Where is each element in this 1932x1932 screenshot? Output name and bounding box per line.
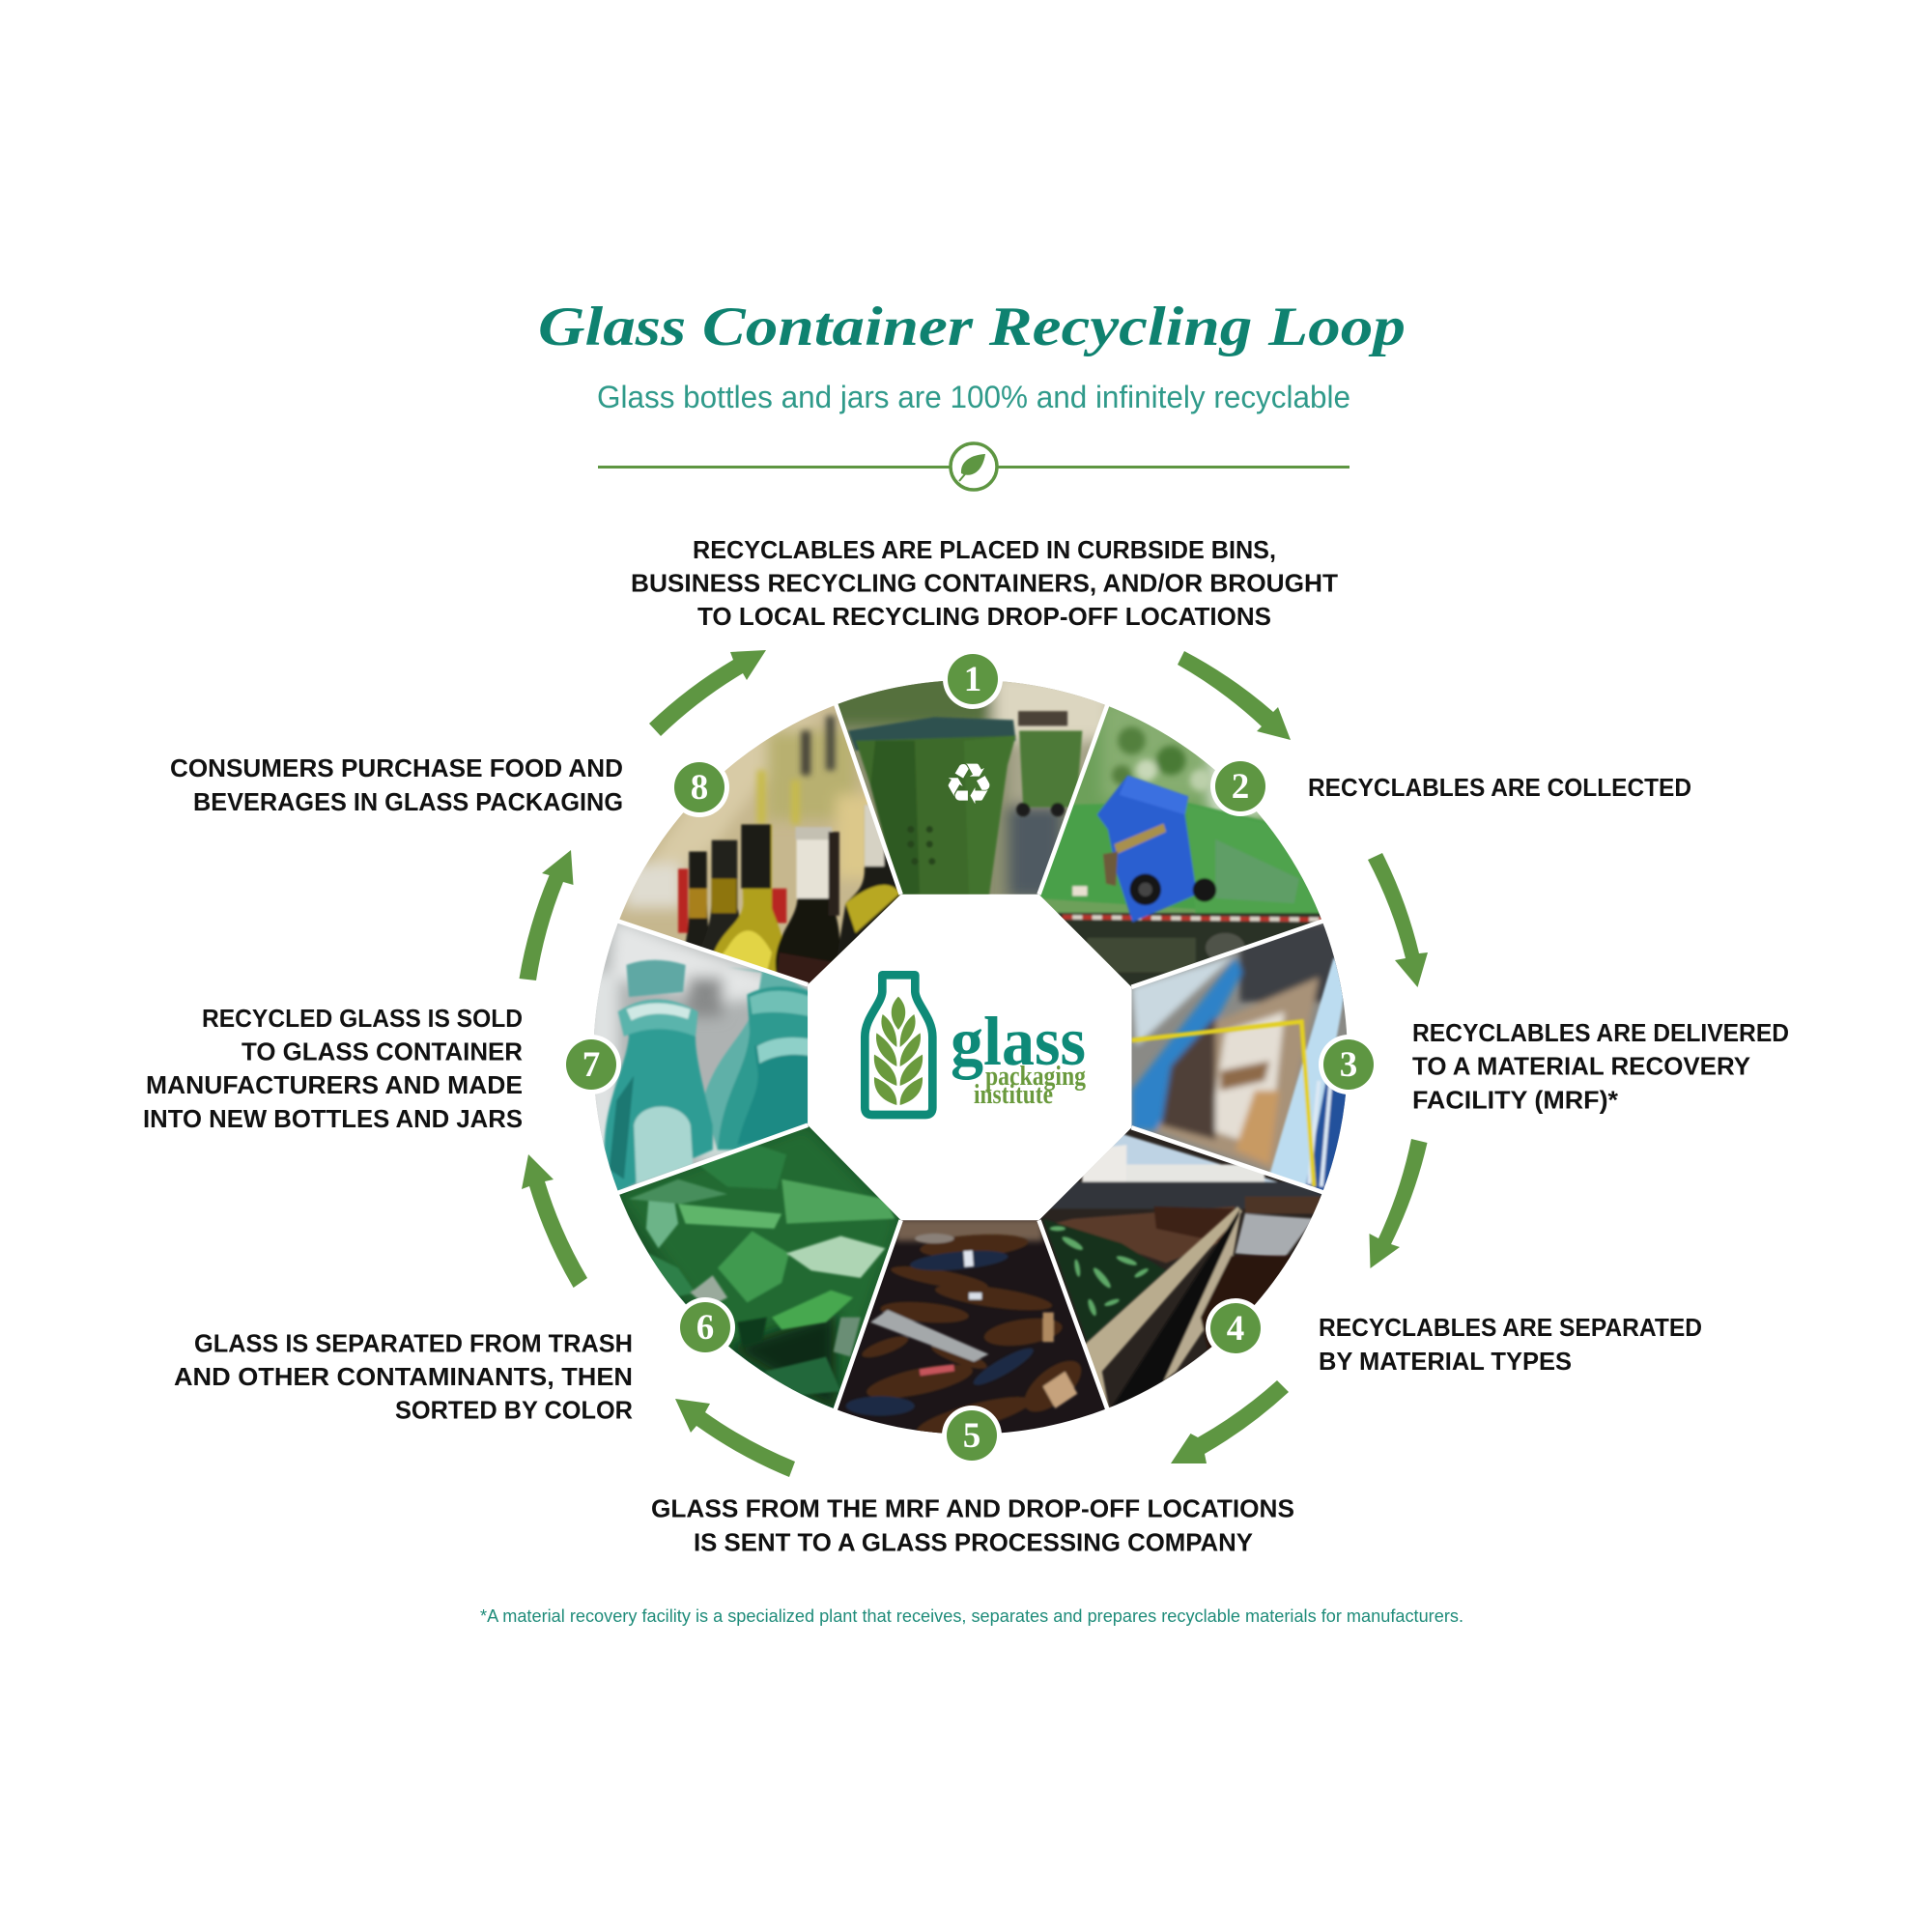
arrow: step 6 to 7: [522, 1154, 587, 1288]
number badge 5: [942, 1406, 1002, 1465]
number badge 7: [561, 1035, 621, 1094]
icon: recycling symbol: ♻: [944, 752, 994, 817]
step 6 text: GLASS IS SEPARATED FROM TRASH: [194, 1329, 633, 1358]
arrow: step 4 to 5: [1171, 1380, 1289, 1463]
photo: material recovery facility conveyor: [1132, 923, 1347, 1190]
step 2 text: RECYCLABLES ARE COLLECTED: [1308, 773, 1691, 802]
number badge 2: 2: [1232, 767, 1249, 807]
step 1 text: TO LOCAL RECYCLING DROP-OFF LOCATIONS: [697, 602, 1271, 631]
step 7 text: TO GLASS CONTAINER: [242, 1037, 523, 1066]
number badge 3: 3: [1340, 1045, 1357, 1085]
step 3 text: RECYCLABLES ARE DELIVERED: [1412, 1018, 1789, 1047]
step 1 text: BUSINESS RECYCLING CONTAINERS, AND/OR BROUGHT: [631, 568, 1338, 597]
step 7 text: INTO NEW BOTTLES AND JARS: [143, 1104, 523, 1133]
step 7 text: [143, 1004, 523, 1133]
photo: sorting bins: [1039, 1128, 1321, 1408]
footnote: *A material recovery facility is a specialized plant that receives, separates and prepares recyclable materials for manufacturers.: [480, 1606, 1463, 1626]
step 6 text: SORTED BY COLOR: [395, 1395, 633, 1424]
number badge 4: 4: [1227, 1309, 1244, 1349]
number badge 8: [669, 757, 729, 817]
number badge 7: 7: [582, 1045, 600, 1085]
step 1 text: [631, 535, 1338, 631]
step 4 text: BY MATERIAL TYPES: [1319, 1347, 1572, 1376]
step 8 text: CONSUMERS PURCHASE FOOD AND: [170, 753, 623, 782]
sector divider lines: [610, 697, 1331, 1415]
step 5 text: IS SENT TO A GLASS PROCESSING COMPANY: [694, 1528, 1253, 1557]
number badge 2: [1210, 756, 1270, 816]
divider with leaf icon: [598, 443, 1350, 490]
number badge 4: [1206, 1298, 1265, 1358]
step 4 text: [1319, 1313, 1702, 1376]
step 8 text: [170, 753, 623, 816]
arrow: step 3 to 4: [1370, 1139, 1428, 1268]
center octagon: [808, 895, 1131, 1220]
logo wordmark: institute: [974, 1080, 1053, 1110]
number badge 5: 5: [963, 1416, 980, 1456]
step 7 text: RECYCLED GLASS IS SOLD: [202, 1004, 523, 1033]
number badge 6: 6: [696, 1308, 714, 1348]
photo: teal glass bottles: [594, 923, 808, 1190]
logo wordmark: [951, 1003, 1086, 1110]
icon: bottle with leaf: [865, 975, 932, 1115]
photo: collection truck with blue bin: [1039, 706, 1321, 987]
step 1 text: RECYCLABLES ARE PLACED IN CURBSIDE BINS,: [693, 535, 1276, 564]
step 3 text: FACILITY (MRF)*: [1412, 1086, 1619, 1115]
subtitle: Glass bottles and jars are 100% and infinitely recyclable: [597, 380, 1350, 414]
step 5 text: GLASS FROM THE MRF AND DROP-OFF LOCATIONS: [651, 1493, 1294, 1522]
center logo: [865, 975, 1086, 1115]
step 7 text: MANUFACTURERS AND MADE: [146, 1070, 523, 1099]
number badge 1: 1: [964, 660, 981, 699]
arrow: step 2 to 3: [1368, 853, 1428, 987]
arrow: step 5 to 6: [675, 1399, 795, 1477]
logo wordmark: glass: [951, 1003, 1086, 1080]
photo: wine and oil bottles on shelf: [620, 705, 900, 985]
arrow: step 8 to 1: [649, 650, 766, 736]
step 6 text: [174, 1329, 633, 1424]
step 3 text: [1412, 1018, 1789, 1115]
photo wheel: [580, 657, 1422, 1445]
arrow: step 7 to 8: [520, 850, 574, 980]
step 6 text: AND OTHER CONTAMINANTS, THEN: [174, 1362, 633, 1391]
title: Glass Container Recycling Loop: [538, 297, 1406, 357]
arrow: step 1 to 2: [1178, 651, 1291, 740]
step 5 text: [651, 1493, 1294, 1557]
photo: crushed green glass: [619, 1125, 900, 1408]
logo wordmark: packaging: [985, 1062, 1086, 1092]
number badge 8: 8: [691, 768, 708, 808]
step 8 text: BEVERAGES IN GLASS PACKAGING: [193, 787, 623, 816]
number badge 6: [675, 1297, 735, 1357]
number badge 1: [943, 649, 1003, 709]
step 4 text: RECYCLABLES ARE SEPARATED: [1319, 1313, 1702, 1342]
number badge 3: [1319, 1035, 1378, 1094]
photo: pile of brown glass bottles: [838, 1220, 1105, 1434]
photo: curbside recycling bin: [838, 681, 1105, 895]
step 3 text: TO A MATERIAL RECOVERY: [1412, 1051, 1750, 1080]
